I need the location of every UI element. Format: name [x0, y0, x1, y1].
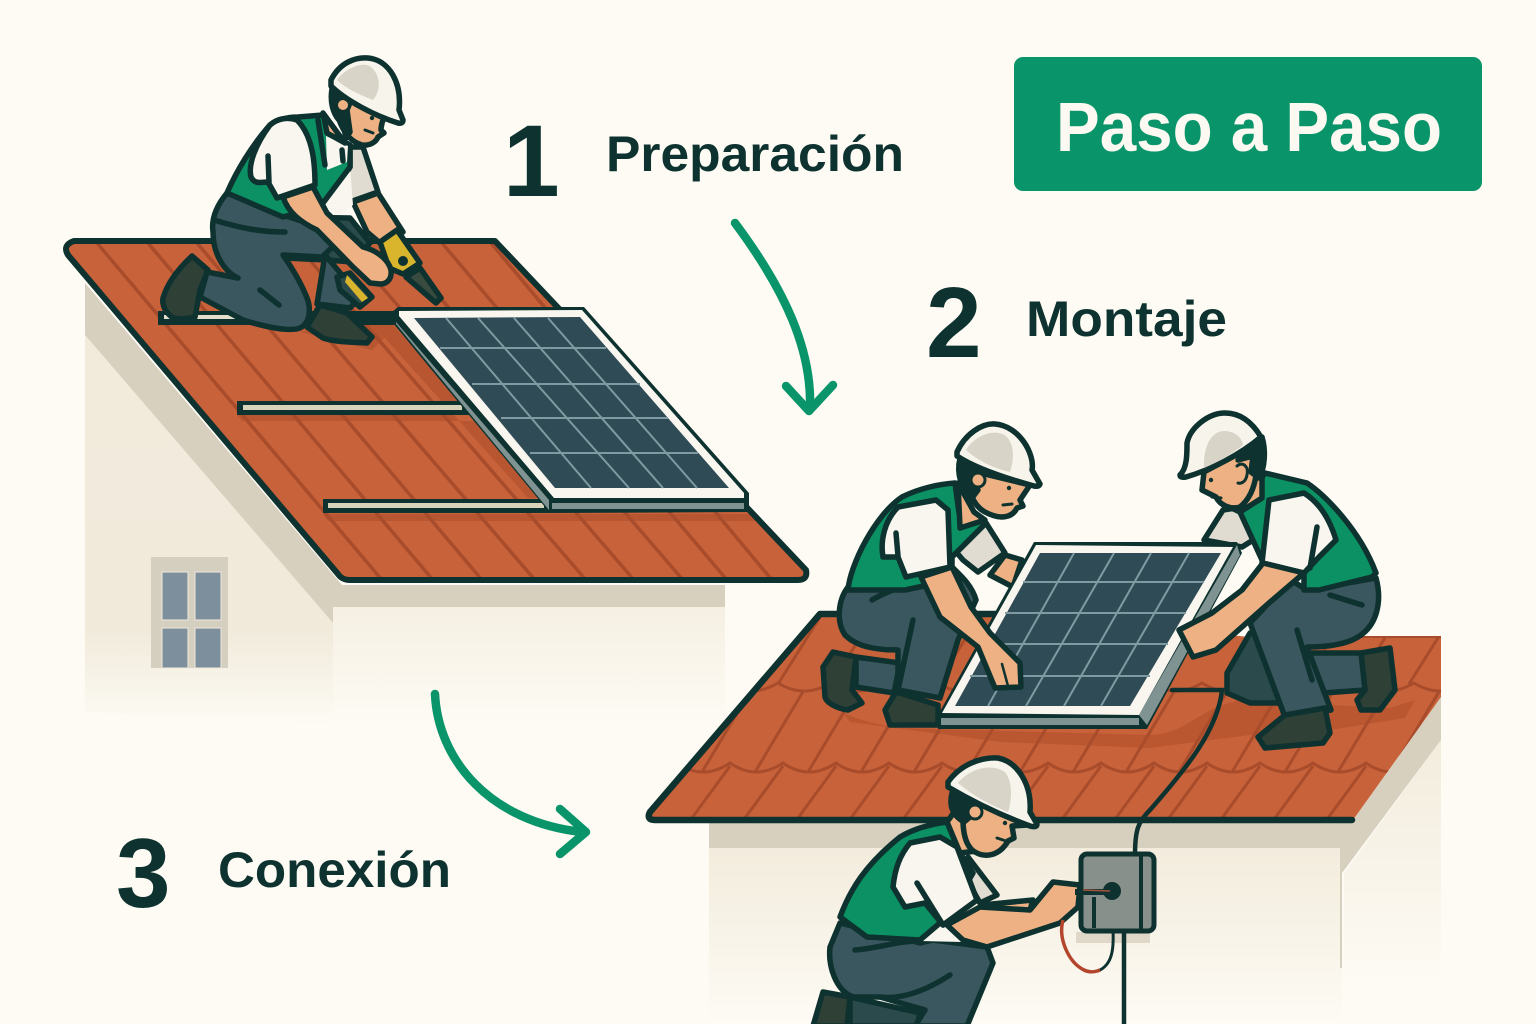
step 2 number: 2: [926, 267, 982, 379]
trousers: [1250, 563, 1379, 717]
roof 2 with scalloped tiles: [649, 614, 1467, 820]
white chest: [920, 915, 975, 942]
far sleeve: [967, 857, 997, 903]
worker 4: electrician: [813, 758, 1080, 1024]
shirt sleeve: [1262, 493, 1336, 573]
rear shin: [1307, 653, 1365, 693]
rear shin: [856, 657, 900, 693]
rear thigh: [1227, 633, 1290, 703]
house 1: walls, window and eave shadow: [85, 283, 725, 725]
arrow from step 1 to step 2: [735, 223, 833, 411]
worker 2: left installer: [823, 424, 1040, 725]
shirt sleeve: [882, 500, 950, 577]
worker 1 with drill: [163, 58, 441, 343]
far arm: [982, 900, 1033, 913]
near arm: [1179, 563, 1304, 657]
head: [1180, 413, 1264, 512]
step 3 number: 3: [116, 818, 171, 928]
vest: [1239, 473, 1376, 590]
helmet: [957, 424, 1040, 486]
helmet: [948, 758, 1037, 827]
front boot: [1258, 708, 1330, 748]
helmet: [1180, 413, 1261, 477]
chest gap: [326, 136, 348, 170]
vest: [227, 115, 350, 217]
far leg: [283, 217, 370, 262]
helmet: [331, 58, 403, 123]
step 1 number: 1: [503, 104, 560, 218]
title badge: Paso a Paso: [1056, 88, 1442, 166]
house 2: walls and eave shadow: [709, 697, 1441, 1024]
cable from panel to junction box: [1135, 690, 1222, 855]
head: [323, 58, 403, 145]
near arm: [947, 882, 1080, 947]
front boot: [885, 692, 938, 725]
worker 3: right installer: [1179, 413, 1395, 748]
solar panel 2: [938, 542, 1242, 729]
step 1 label: Preparación: [606, 126, 904, 182]
roof 1 with tiles: [66, 241, 806, 580]
far arms of the two mounting workers: [952, 507, 1258, 587]
head: [947, 758, 1037, 855]
rear boot: [813, 992, 850, 1024]
trousers: [830, 923, 993, 1024]
step 3 label: Conexión: [218, 842, 451, 898]
near arm: [283, 187, 391, 284]
arrow from step 2 to step 3: [435, 694, 586, 854]
step 2 label: Montaje: [1026, 291, 1227, 347]
front leg: [317, 255, 361, 308]
trousers: [839, 565, 976, 698]
rear leg: [850, 997, 920, 1024]
window: [151, 557, 228, 668]
front boot: [307, 305, 372, 343]
rear boot: [1357, 648, 1395, 710]
far arm: [353, 193, 403, 243]
drill: [337, 230, 441, 307]
rear boot: [823, 652, 862, 710]
vest: [848, 483, 986, 590]
head: [957, 424, 1040, 528]
junction box with cables: [1062, 854, 1154, 1024]
trousers: [200, 193, 345, 329]
shirt sleeve: [250, 118, 315, 198]
rear boot: [163, 256, 208, 319]
mounting rails on roof 1: [158, 311, 551, 513]
shirt sleeve: [893, 837, 977, 925]
solar panel 1: [392, 307, 749, 513]
white chest: [322, 167, 353, 215]
near arm: [921, 567, 1021, 688]
title badge: [1014, 57, 1482, 191]
vest: [840, 822, 973, 940]
far sleeve: [337, 147, 378, 203]
